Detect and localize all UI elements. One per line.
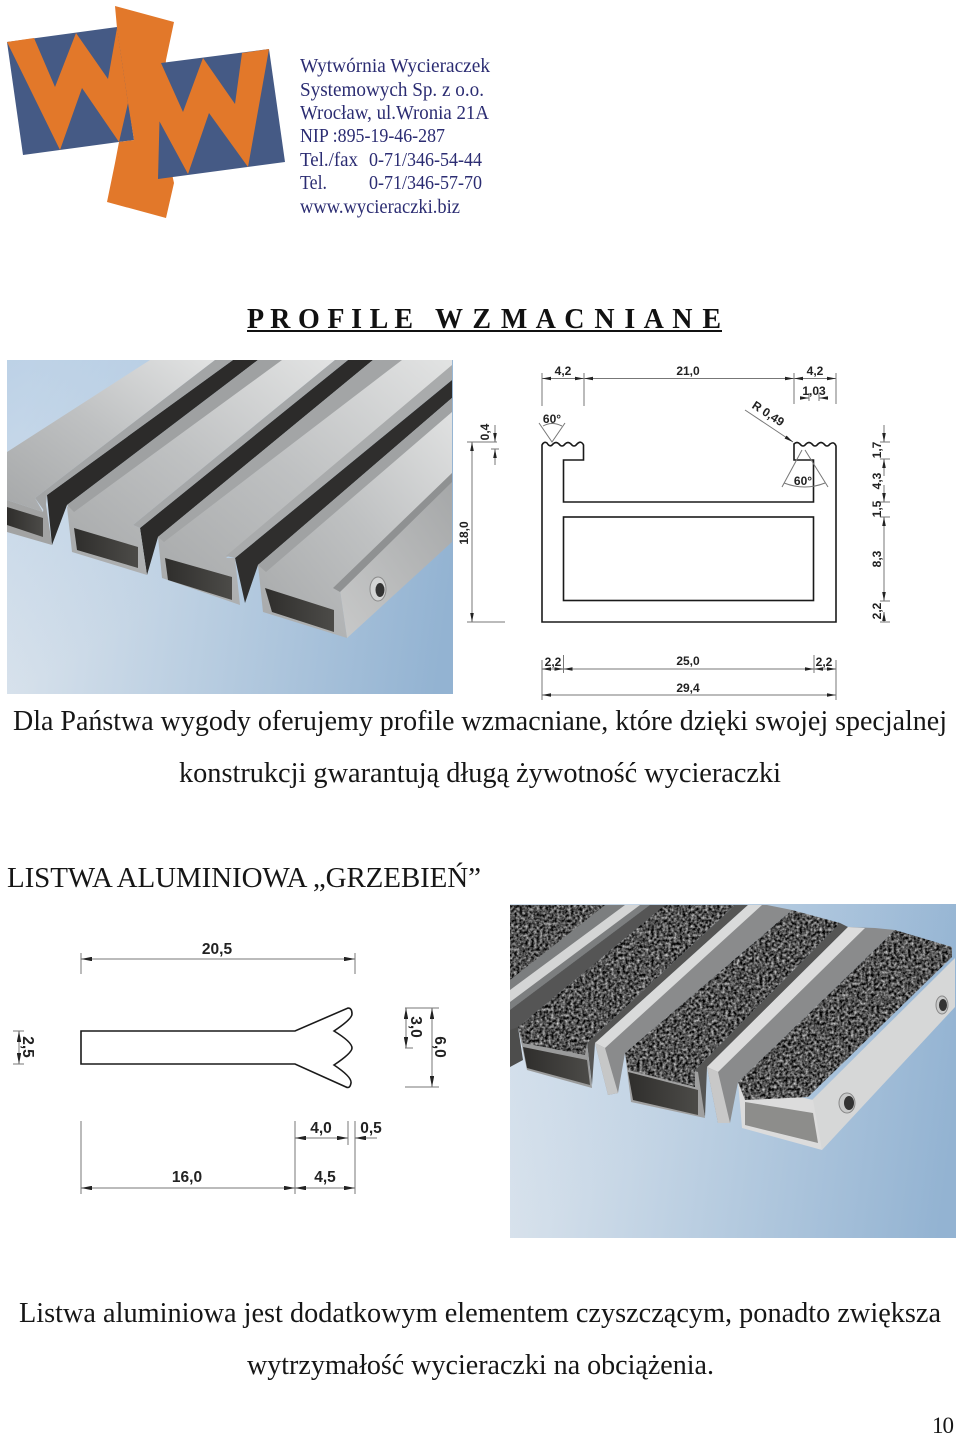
rail 1: [7, 360, 258, 545]
company address block: Tel./fax: [300, 150, 358, 171]
left dimensions: [457, 423, 505, 622]
section heading: aluminium strip: LISTWA ALUMINIOWA „GRZEBIEŃ”: [7, 861, 481, 894]
top dimensions: 4,2: [807, 364, 824, 378]
company address block: www.wycieraczki.biz: [300, 197, 460, 218]
right dimensions: 8,3: [870, 550, 884, 567]
description text: reinforced profiles: [13, 706, 947, 789]
overall width dimension: [81, 941, 355, 974]
profile outline: [542, 442, 836, 622]
left dimensions: 18,0: [457, 521, 471, 545]
bottom dimensions: [542, 654, 836, 700]
company address block: Wytwórnia Wycieraczek: [300, 56, 490, 77]
bottom dimensions: 2,2: [816, 655, 833, 669]
company address block: Systemowych Sp. z o.o.: [300, 80, 484, 101]
lower dimensions: 4,0: [310, 1120, 332, 1137]
overall width dimension: 20,5: [202, 941, 232, 958]
rail C: [625, 910, 895, 1123]
lower dimensions: 0,5: [360, 1120, 382, 1137]
lower dimensions: [81, 1120, 382, 1194]
top dimensions: 1,03: [802, 384, 826, 398]
rail D: [738, 930, 955, 1150]
company address block: Wrocław, ul.Wronia 21A: [300, 103, 489, 124]
lower dimensions: 4,5: [314, 1169, 336, 1186]
title: P R O F I L E: [247, 304, 413, 335]
company address block: 0-71/346-57-70: [369, 173, 482, 194]
lower dimensions: 16,0: [172, 1169, 202, 1186]
company address block: [300, 56, 490, 218]
inner chamber: [564, 517, 814, 600]
right dimensions: [870, 425, 890, 622]
company address block: 0-71/346-54-44: [369, 150, 482, 171]
right dimensions: 2,2: [870, 602, 884, 619]
rail B: [518, 905, 792, 1095]
company address block: Tel.: [300, 173, 327, 194]
rail 3: [158, 360, 452, 605]
logo: WW company mark: [7, 6, 285, 218]
description text: aluminium strip: [19, 1298, 941, 1381]
title: W Z M A C N I A N E: [435, 304, 721, 335]
description text: aluminium strip: wytrzymałość wycieraczki na obciążenia.: [247, 1350, 714, 1381]
comb strip outline: [81, 1008, 352, 1088]
thickness dimension: [13, 1031, 36, 1064]
top dimensions: 4,2: [555, 364, 572, 378]
title: [247, 304, 722, 335]
rail 2: [67, 360, 373, 575]
angle and radius callouts: [539, 398, 828, 488]
angle and radius callouts: R 0,49: [750, 398, 787, 429]
angle and radius callouts: 60°: [794, 474, 812, 488]
top dimensions: [542, 364, 836, 406]
height dimensions: [405, 1008, 448, 1087]
photo: strips with textile insert: [510, 904, 956, 1238]
right dimensions: 1,5: [870, 500, 884, 517]
thickness dimension: 2,5: [19, 1036, 36, 1058]
angle and radius callouts: 60°: [543, 412, 561, 426]
right dimensions: 1,7: [870, 441, 884, 458]
rail A: [510, 905, 665, 1067]
photo: aluminium reinforced profiles: [7, 360, 453, 694]
bottom dimensions: 29,4: [676, 681, 700, 695]
height dimensions: 6,0: [431, 1036, 448, 1058]
description text: reinforced profiles: Dla Państwa wygody oferujemy profile wzmacniane, które dzięki swojej specjalnej: [13, 706, 947, 737]
technical drawing: reinforced profile cross-section: [457, 364, 890, 700]
description text: reinforced profiles: konstrukcji gwarantują długą żywotność wycieraczki: [179, 758, 781, 789]
bottom dimensions: 2,2: [545, 655, 562, 669]
description text: aluminium strip: Listwa aluminiowa jest dodatkowym elementem czyszczącym, ponadto zwiększa: [19, 1298, 941, 1329]
right dimensions: 4,3: [870, 472, 884, 489]
company address block: NIP :895-19-46-287: [300, 126, 445, 147]
top dimensions: 21,0: [676, 364, 700, 378]
height dimensions: 3,0: [407, 1016, 424, 1038]
rail 4: [258, 398, 452, 638]
technical drawing: comb strip: [13, 941, 448, 1194]
bottom dimensions: 25,0: [676, 654, 700, 668]
left dimensions: 0,4: [478, 423, 492, 440]
